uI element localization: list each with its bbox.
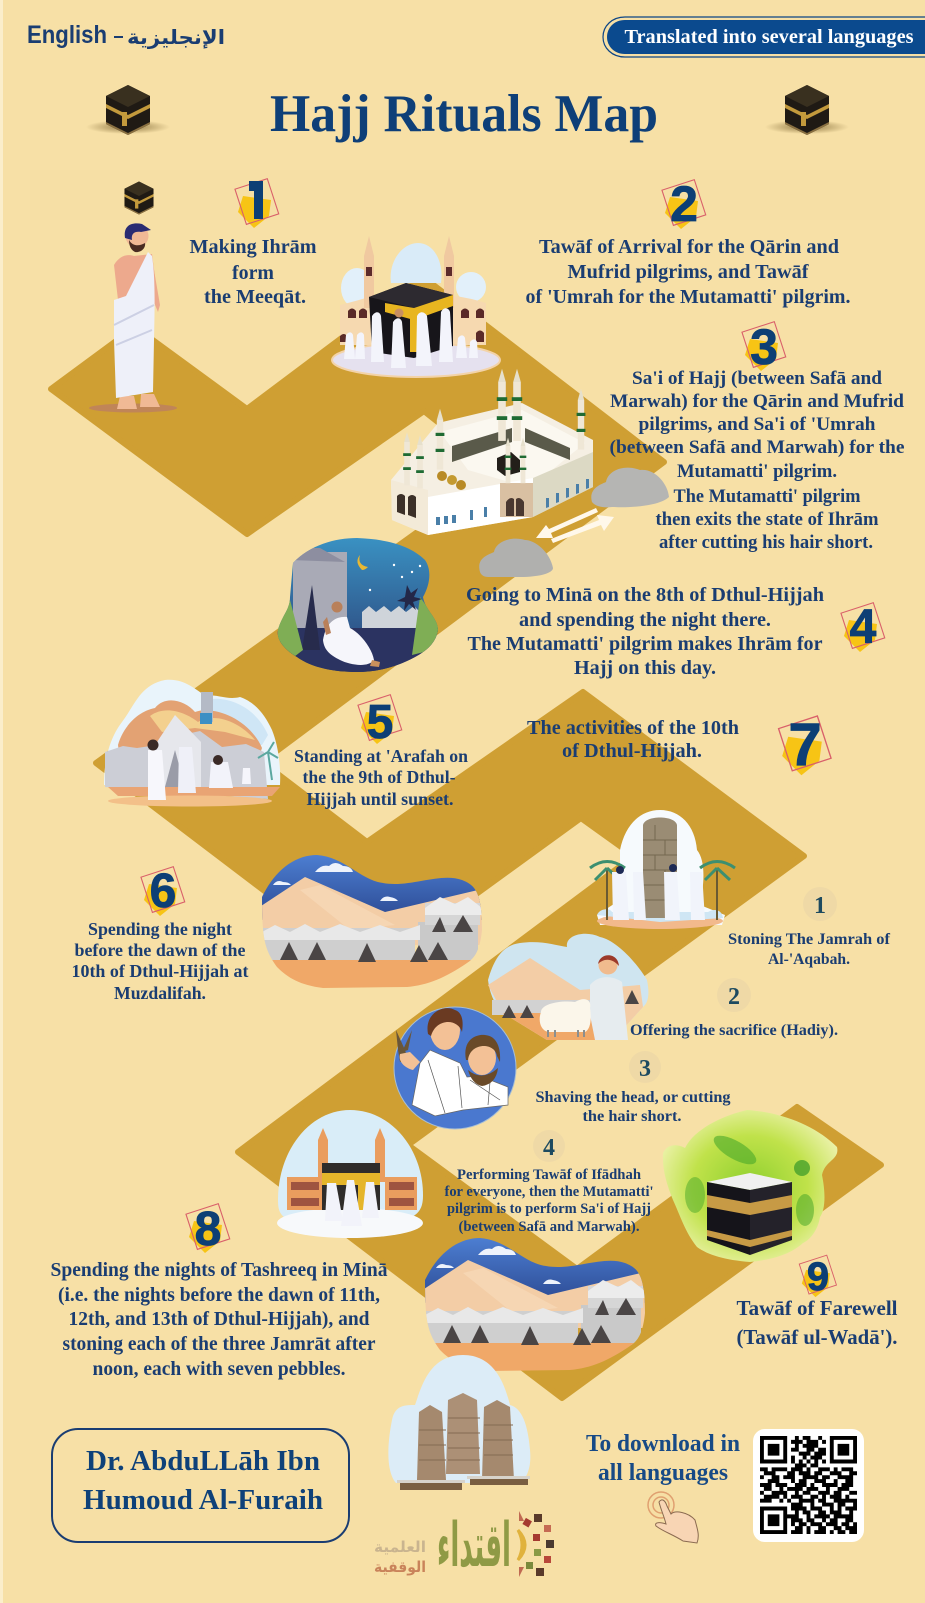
step 4 text: The Mutamatti' pilgrim makes Ihrām for — [468, 633, 823, 655]
sub-step 3 number: 3 — [639, 1056, 651, 1082]
step 8 text: noon, each with seven pebbles. — [92, 1358, 346, 1380]
step 2 badge — [662, 176, 706, 232]
step 3 badge: 3 — [750, 319, 778, 375]
step 8 text: 12th, and 13th of Dthul-Hijjah), and — [68, 1308, 370, 1330]
step 8 badge — [186, 1203, 230, 1256]
arrows between Safa and Marwah — [536, 508, 614, 543]
step 9 text — [736, 1296, 898, 1349]
sub-step 3 text — [536, 1089, 730, 1125]
step 7 text: of Dthul-Hijjah. — [562, 740, 702, 762]
step 8 text — [50, 1259, 388, 1380]
sub-step 2 number — [717, 978, 751, 1012]
QR code — [753, 1429, 864, 1542]
download text: all languages — [598, 1460, 728, 1486]
step 3 text: Mutamatti' pilgrim. — [677, 461, 837, 482]
step 4 badge: 4 — [850, 601, 877, 654]
sub-step 3 text: Shaving the head, or cutting — [536, 1089, 730, 1106]
icon: right kaaba — [765, 85, 849, 135]
sub-step 2 number: 2 — [728, 984, 740, 1010]
sub-step 4 text: Performing Tawāf of Ifādhah — [457, 1167, 641, 1183]
step 2 text: Mufrid pilgrims, and Tawāf — [568, 261, 809, 283]
sub-step 1 text — [728, 931, 891, 968]
step 5 text — [294, 746, 468, 809]
step 1 text — [190, 236, 317, 308]
illustration: night at Mina — [278, 538, 438, 672]
step 9 text: Tawāf of Farewell — [736, 1296, 898, 1320]
winding gold path — [51, 277, 881, 1398]
illustration: offering the sacrifice — [488, 934, 648, 1040]
step 8 text: stoning each of the three Jamrāt after — [62, 1333, 376, 1355]
step 3 text: (between Safā and Marwah) for the — [610, 437, 904, 458]
step 7 text: The activities of the 10th — [527, 717, 739, 739]
sub-step 1 text: Al-'Aqabah. — [768, 951, 850, 968]
language label — [27, 21, 225, 49]
illustration: kaaba on green splash — [663, 1110, 837, 1262]
illustration: kaaba bubble, Tawaf of Ifadhah — [277, 1110, 423, 1238]
sub-step 4 text: for everyone, then the Mutamatti' — [444, 1184, 654, 1200]
author box: Humoud Al-Furaih — [83, 1485, 323, 1516]
step 4 text: Going to Minā on the 8th of Dthul-Hijjah — [466, 584, 824, 606]
step 8 badge: 8 — [195, 1203, 221, 1256]
step 3 text — [610, 368, 904, 553]
step 2 text: Tawāf of Arrival for the Qārin and — [539, 236, 839, 258]
step 3 text: Sa'i of Hajj (between Safā and — [632, 368, 882, 389]
logo: Iqtidaa foundation: الوقفية — [374, 1558, 426, 1576]
step 7 badge: 7 — [788, 711, 822, 778]
logo: Iqtidaa foundation: اقتداء — [437, 1510, 511, 1581]
step 5 text: Hijjah until sunset. — [306, 789, 454, 809]
step 3 text: Marwah) for the Qārin and Mufrid — [610, 391, 904, 412]
sub-step 2 text: Offering the sacrifice (Hadiy). — [630, 1022, 838, 1039]
step 3 badge — [742, 319, 786, 375]
translated pill — [603, 17, 925, 57]
illustration: tents at Mina — [418, 1233, 653, 1375]
step 5 badge — [358, 695, 402, 749]
language label: الإنجليزية — [127, 25, 225, 49]
icon: small kaaba above pilgrim — [124, 182, 154, 214]
title: Hajj Rituals Map — [270, 85, 658, 143]
sub-step 1 number — [803, 887, 837, 921]
sub-step 3 number — [629, 1051, 661, 1083]
step 8 text: (i.e. the nights before the dawn of 11th, — [58, 1284, 380, 1306]
icon: left kaaba — [86, 85, 170, 135]
sub-step 4 text — [444, 1167, 654, 1235]
step 4 text: Hajj on this day. — [574, 657, 716, 679]
illustration: Arafah — [104, 680, 280, 806]
step 5 text: the the 9th of Dthul- — [302, 767, 456, 787]
download text — [586, 1431, 740, 1486]
step 3 text: The Mutamatti' pilgrim — [674, 487, 861, 507]
sub-step 3 text: the hair short. — [582, 1108, 682, 1125]
step 2 text: of 'Umrah for the Mutamatti' pilgrim. — [526, 286, 850, 308]
sub-step 4 text: pilgrim is to perform Sa'i of Hajj — [447, 1201, 651, 1217]
step 2 text — [526, 236, 850, 308]
sub-step 4 text: (between Safā and Marwah). — [458, 1219, 640, 1235]
author box: Dr. AbduLLāh Ibn — [86, 1446, 320, 1477]
step 8 text: Spending the nights of Tashreeq in Minā — [50, 1259, 388, 1281]
step 2 badge: 2 — [670, 176, 698, 232]
step 1 badge — [235, 179, 279, 228]
rock: Marwah — [591, 468, 669, 507]
step 4 badge — [841, 601, 885, 654]
pilgrim in ihram — [89, 223, 177, 412]
step 1 text: Making Ihrām — [190, 236, 317, 258]
step 3 text: then exits the state of Ihrām — [656, 510, 879, 530]
step 9 badge — [799, 1255, 836, 1299]
sub-step 1 number: 1 — [814, 893, 826, 919]
logo: Iqtidaa foundation — [374, 1510, 554, 1581]
step 6 text: 10th of Dthul-Hijjah at — [72, 961, 249, 981]
step 6 badge: 6 — [150, 865, 176, 918]
step 7 badge — [779, 711, 831, 778]
illustration: kaaba with pilgrims — [332, 236, 500, 377]
step 5 text: Standing at 'Arafah on — [294, 746, 468, 766]
step 1 text: the Meeqāt. — [204, 286, 306, 308]
sub-step 4 number — [533, 1130, 565, 1162]
translated pill: Translated into several languages — [624, 26, 914, 48]
author box — [52, 1429, 349, 1542]
step 3 text: pilgrims, and Sa'i of 'Umrah — [638, 414, 876, 435]
rock: Safa — [479, 539, 553, 577]
illustration: grand mosque — [391, 369, 593, 535]
step 5 badge: 5 — [367, 696, 393, 749]
step 9 badge: 9 — [807, 1255, 829, 1299]
sub-step 4 number: 4 — [543, 1135, 555, 1161]
step 6 text — [72, 919, 249, 1003]
step 9 text: (Tawāf ul-Wadā'). — [736, 1325, 898, 1349]
sub-step 1 text: Stoning The Jamrah of — [728, 931, 891, 948]
step 4 text — [466, 584, 824, 679]
step 6 badge — [141, 865, 185, 918]
step 1 text: form — [232, 262, 274, 284]
illustration: shaving pilgrims — [394, 1007, 516, 1129]
illustration: tents at Muzdalifah — [255, 850, 490, 992]
step 6 text: Muzdalifah. — [114, 983, 206, 1003]
download text: To download in — [586, 1431, 740, 1457]
step 3 text: after cutting his hair short. — [659, 533, 873, 553]
icon: tapping hand — [648, 1492, 698, 1543]
step 4 text: and spending the night there. — [519, 609, 771, 631]
logo: Iqtidaa foundation: العلمية — [374, 1538, 426, 1556]
language label: English — [27, 21, 107, 49]
step 7 text — [527, 717, 739, 762]
step 6 text: Spending the night — [88, 919, 232, 939]
step 6 text: before the dawn of the — [74, 940, 246, 960]
illustration: three Jamarat pillars — [388, 1355, 530, 1490]
illustration: stoning the Jamrah — [590, 810, 735, 929]
